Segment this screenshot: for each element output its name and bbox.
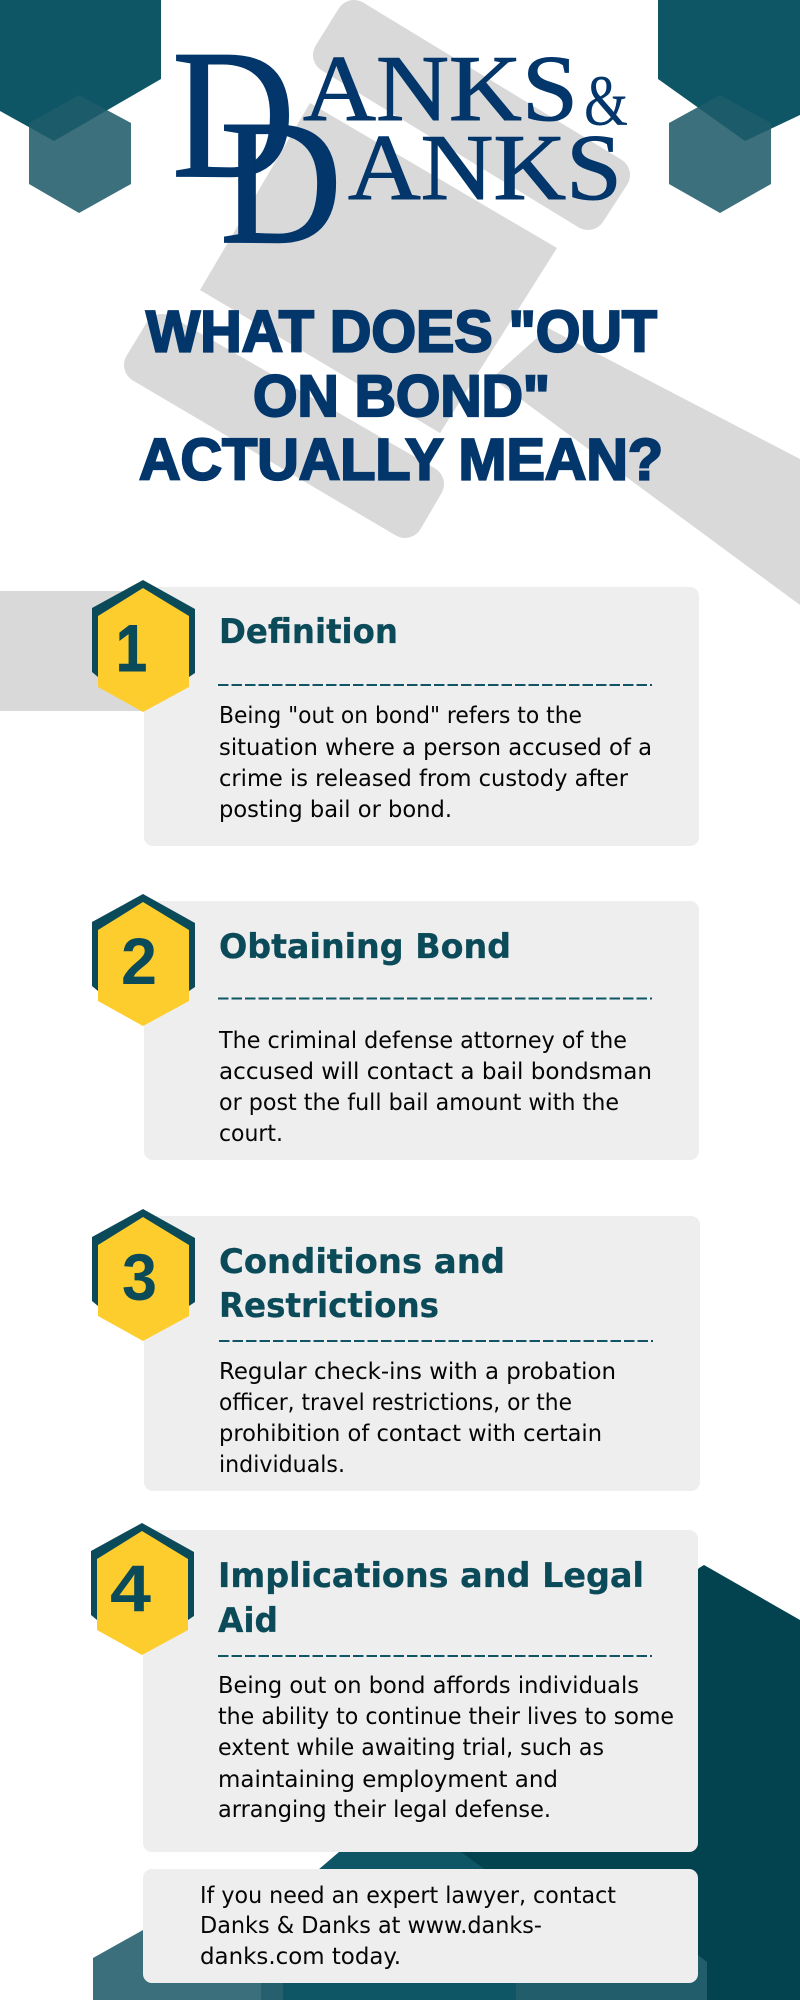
heading: definition: Definition — [219, 612, 398, 652]
icon: badge 1: 1 — [116, 611, 147, 685]
text: definition body: crime is released from custody after — [219, 766, 629, 792]
text: contact details: Danks & Danks at www.danks- — [200, 1913, 542, 1939]
text: obtaining bond body: court. — [219, 1121, 283, 1147]
title: WHAT DOES "OUT — [146, 300, 657, 364]
title: ACTUALLY MEAN? — [139, 428, 663, 492]
text: contact details: danks.com today. — [200, 1944, 401, 1970]
heading: obtaining bond: Obtaining Bond — [219, 927, 511, 967]
text: implications body: maintaining employment and — [218, 1767, 558, 1793]
text: definition body: situation where a person accused of a — [219, 735, 652, 761]
title — [139, 300, 663, 492]
icon: badge 4: 4 — [110, 1551, 151, 1625]
decoration: grey band behind badge 1 — [0, 591, 150, 711]
heading: conditions and restrictions — [219, 1242, 505, 1326]
text: conditions body: Regular check-ins with a probation — [219, 1359, 616, 1385]
logo: Danks & Danks: D — [172, 12, 295, 216]
heading: implications and legal aid — [218, 1556, 644, 1641]
heading: implications and legal aid: Implications and Legal — [218, 1556, 644, 1596]
logo: Danks & Danks: ANKS — [348, 116, 622, 220]
panel: definition — [144, 587, 699, 846]
decoration: top right hexagons — [658, 0, 800, 213]
text: conditions body: officer, travel restrictions, or the — [219, 1390, 572, 1416]
icon: gavel watermark — [142, 18, 800, 605]
text: obtaining bond body — [218, 1028, 652, 1147]
text: contact details: If you need an expert lawyer, contact — [200, 1883, 616, 1909]
background: bottom teal shapes — [93, 1565, 800, 2000]
icon: badge 3: 3 — [122, 1240, 157, 1314]
title: ON BOND" — [253, 364, 550, 429]
logo: Danks & Danks: & — [584, 61, 628, 141]
text: conditions body — [219, 1359, 616, 1478]
text: obtaining bond body: or post the full bail amount with the — [219, 1090, 619, 1116]
heading: implications and legal aid: Aid — [218, 1601, 278, 1641]
text: definition body: posting bail or bond. — [219, 797, 452, 823]
logo: Danks & Danks: D — [220, 83, 342, 281]
text: obtaining bond body: The criminal defense attorney of the — [218, 1028, 627, 1054]
text: implications body: arranging their legal defense. — [218, 1797, 551, 1823]
callout: contact — [143, 1869, 698, 1983]
icon: badge 3 — [92, 1209, 195, 1341]
heading: conditions and restrictions: Conditions and — [219, 1242, 505, 1282]
text: contact details — [200, 1883, 616, 1970]
text: conditions body: prohibition of contact with certain — [219, 1421, 602, 1447]
icon: badge 2: 2 — [121, 924, 157, 998]
text: implications body: the ability to continue their lives to some — [218, 1704, 674, 1730]
text: implications body — [218, 1673, 674, 1823]
icon: badge 2 — [92, 894, 195, 1026]
decoration: top left hexagons — [0, 0, 161, 213]
logo: Danks & Danks — [172, 12, 628, 281]
heading: conditions and restrictions: Restrictions — [219, 1286, 439, 1326]
text: implications body: extent while awaiting trial, such as — [218, 1735, 604, 1761]
panel: implications and legal aid — [143, 1530, 698, 1852]
text: definition body — [219, 703, 652, 823]
panel: obtaining bond — [144, 901, 699, 1160]
icon: badge 1 — [92, 580, 195, 712]
icon: badge 4 — [91, 1523, 194, 1655]
logo: Danks & Danks: ANKS — [303, 37, 578, 141]
panel: conditions and restrictions — [144, 1216, 700, 1491]
text: definition body: Being "out on bond" refers to the — [219, 703, 582, 729]
text: conditions body: individuals. — [219, 1452, 345, 1478]
text: implications body: Being out on bond affords individuals — [218, 1673, 639, 1699]
text: obtaining bond body: accused will contact a bail bondsman — [219, 1059, 652, 1085]
